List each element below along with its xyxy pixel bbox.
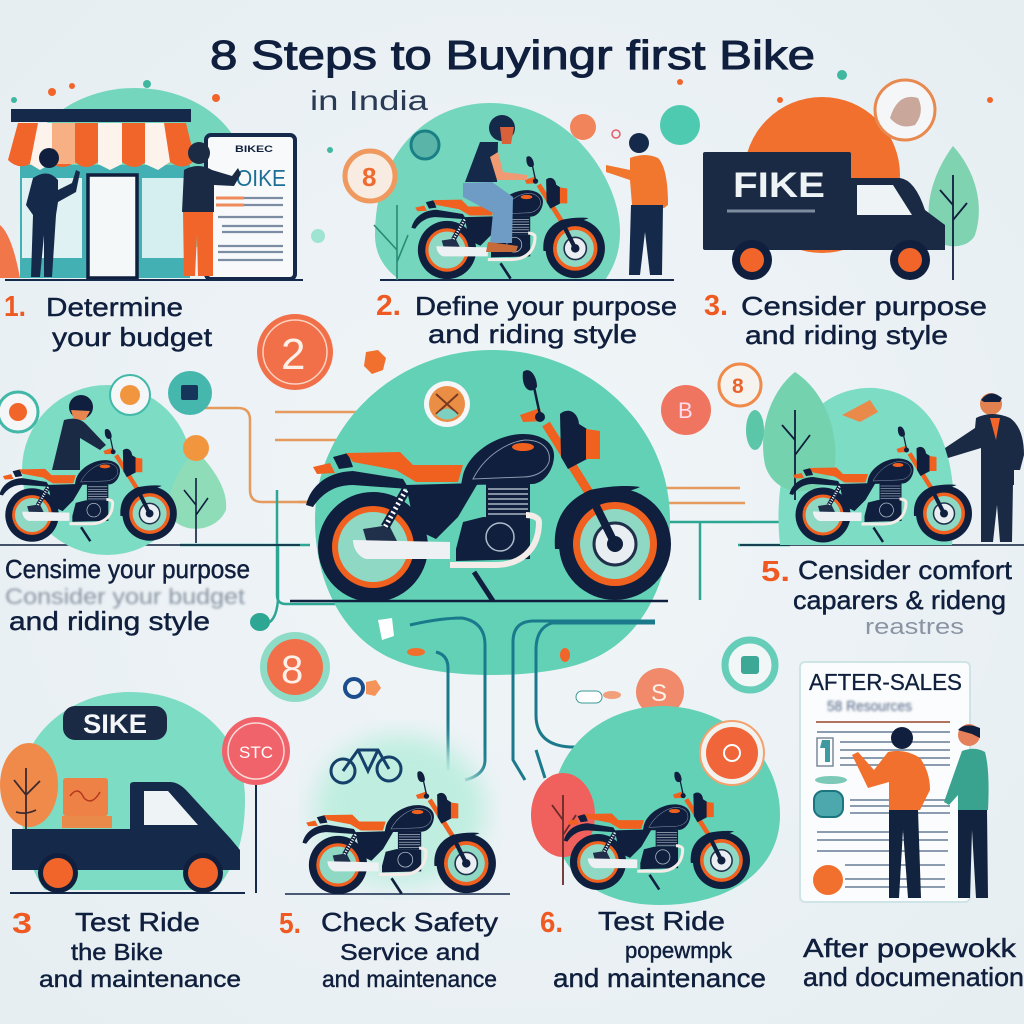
heading: AFTER-SALES bbox=[809, 669, 962, 695]
connector lines lower bbox=[410, 618, 655, 780]
panel: step 3 truck bbox=[703, 80, 979, 280]
rider bbox=[463, 115, 527, 252]
step 4 label: Consider your budget bbox=[5, 584, 245, 609]
teal backdrop bbox=[25, 88, 245, 262]
badge 8: 8 bbox=[281, 648, 303, 692]
step 3 label bbox=[704, 290, 987, 350]
document panel: BIKEC bbox=[235, 144, 274, 154]
red tree bbox=[531, 773, 595, 885]
tree bbox=[168, 435, 226, 543]
step 1 label: Determine bbox=[46, 292, 183, 322]
motorcycle bbox=[411, 156, 605, 279]
step 5 label: 5. bbox=[761, 556, 790, 588]
step 5 label bbox=[761, 555, 1013, 639]
truck bbox=[12, 782, 240, 893]
step 4 label: and riding style bbox=[9, 606, 210, 636]
left edge orange plant bbox=[0, 225, 20, 278]
panel: step 5 bike bbox=[746, 372, 1024, 545]
orange sun bbox=[744, 97, 900, 253]
motorcycle bbox=[790, 427, 972, 542]
after-sales label bbox=[803, 933, 1024, 992]
subheading: 58 Resources bbox=[827, 698, 912, 715]
panel: step 4 rider bbox=[0, 371, 226, 555]
bottom middle label: and maintenance bbox=[322, 966, 497, 992]
person right bbox=[182, 142, 241, 276]
step 1 label: your budget bbox=[52, 322, 213, 352]
bottom middle label bbox=[279, 907, 498, 992]
storefront bbox=[8, 109, 195, 278]
ground line bbox=[285, 893, 510, 895]
step 2 label: Define your purpose bbox=[415, 291, 677, 321]
number badge 2 bbox=[257, 314, 333, 390]
rider bbox=[52, 395, 106, 470]
step 2 label: and riding style bbox=[428, 319, 637, 349]
badge bbox=[345, 151, 395, 201]
round badge bbox=[700, 721, 764, 785]
S badge bbox=[636, 668, 684, 716]
panel: bottom right bike bbox=[531, 706, 780, 905]
person left bbox=[26, 148, 80, 277]
step 5 label: reastres bbox=[865, 614, 964, 639]
badge B: B bbox=[678, 398, 693, 423]
step 2 label: 2. bbox=[376, 290, 401, 322]
gauge icon bbox=[424, 381, 470, 427]
connector end dot bbox=[250, 613, 270, 631]
number badge 2: 2 bbox=[281, 330, 305, 379]
connector lines upper bbox=[0, 408, 1024, 624]
truck bbox=[703, 152, 945, 280]
truck: FIKE bbox=[733, 166, 825, 205]
bottom middle label: Check Safety bbox=[321, 907, 498, 937]
teal backdrop bbox=[778, 388, 954, 545]
teal circle bbox=[315, 350, 670, 675]
tree bbox=[929, 146, 979, 280]
step 5 label: caparers & rideng bbox=[793, 585, 1006, 615]
badge: 8 bbox=[362, 162, 376, 192]
mini icons bbox=[813, 738, 847, 895]
bottom right label: 6. bbox=[540, 907, 563, 939]
motorcycle bbox=[302, 771, 496, 894]
pale glow bbox=[315, 735, 485, 885]
panel: bottom middle bike bbox=[285, 735, 510, 894]
ring badge: 8 bbox=[732, 375, 744, 398]
person teal bbox=[944, 724, 989, 898]
small red icon bbox=[612, 130, 620, 138]
badge B bbox=[661, 385, 711, 435]
motorcycle bbox=[564, 772, 750, 890]
orange badge bbox=[570, 114, 596, 140]
bottom middle label: 5. bbox=[279, 908, 301, 940]
crate bbox=[62, 778, 112, 828]
ground line bbox=[290, 600, 668, 602]
small teal badge bbox=[411, 131, 439, 159]
main motorcycle bbox=[306, 370, 671, 602]
text rows bbox=[816, 721, 950, 723]
round icon bbox=[875, 80, 935, 140]
document panel bbox=[206, 135, 295, 279]
step 3 label: 3. bbox=[704, 290, 728, 322]
S badge: S bbox=[651, 680, 667, 707]
bottom left label bbox=[12, 907, 241, 992]
step 3 label: and riding style bbox=[745, 320, 948, 350]
bottom left label: the Bike bbox=[71, 939, 163, 965]
ring badge teal bbox=[725, 640, 775, 690]
after-sales label: and documenation bbox=[803, 962, 1024, 992]
bottom middle label: Service and bbox=[340, 939, 480, 965]
document panel: OIKE bbox=[236, 165, 286, 191]
step 3 label: Censider purpose bbox=[741, 291, 987, 321]
small orange flower bbox=[364, 350, 386, 374]
step 1 label bbox=[4, 291, 213, 352]
bottom left label: and maintenance bbox=[39, 966, 241, 992]
tree bbox=[746, 372, 835, 500]
ground line bbox=[380, 279, 674, 281]
standing man bbox=[606, 133, 668, 275]
step 4 label: Censime your purpose bbox=[5, 554, 250, 584]
title: 8 Steps to Buyingr first Bike bbox=[210, 32, 815, 78]
stop sign bbox=[222, 717, 290, 893]
bottom left label: 3 bbox=[12, 908, 32, 940]
ring badge bbox=[719, 364, 761, 406]
bottom right label bbox=[540, 906, 766, 993]
teal backdrop bbox=[22, 385, 192, 555]
icons bbox=[0, 371, 212, 432]
bottom right label: Test Ride bbox=[598, 906, 725, 936]
person orange bbox=[852, 727, 930, 898]
teal ring icon bbox=[660, 105, 700, 145]
bottom left label: Test Ride bbox=[75, 907, 200, 937]
after-sales label: After popewokk bbox=[803, 933, 1017, 963]
title bbox=[210, 32, 815, 116]
teal backdrop bbox=[20, 692, 245, 890]
motorcycle bbox=[0, 429, 177, 542]
small orange cluster bbox=[842, 400, 878, 422]
decorative confetti top bbox=[11, 70, 993, 243]
small tree bbox=[374, 205, 408, 280]
sign: SIKE bbox=[83, 709, 147, 739]
panel: step 1 store bbox=[8, 88, 295, 279]
ground line store bbox=[5, 279, 303, 281]
badge 8 bbox=[260, 632, 330, 702]
step 2 label bbox=[376, 290, 677, 349]
step 4 label bbox=[5, 554, 250, 636]
panel: step 2 rider bbox=[345, 103, 700, 280]
man in suit bbox=[945, 393, 1024, 542]
step 1 label: 1. bbox=[4, 291, 26, 323]
center panel: main bike bbox=[290, 350, 671, 675]
ground line bbox=[10, 892, 245, 894]
step 5 label: Censider comfort bbox=[798, 555, 1013, 585]
paper bbox=[800, 662, 970, 902]
bottom right label: and maintenance bbox=[553, 963, 766, 993]
small floating marks bbox=[345, 618, 621, 757]
teal backdrop bbox=[375, 103, 620, 280]
title: in India bbox=[310, 85, 429, 116]
teal backdrop bbox=[552, 706, 780, 905]
bottom right label: popewmpk bbox=[625, 938, 733, 963]
sign bbox=[63, 706, 167, 740]
stop sign: STC bbox=[239, 743, 273, 762]
orange tree bbox=[0, 743, 58, 830]
panel: bottom left truck bbox=[0, 692, 290, 893]
bicycle icon bbox=[331, 750, 401, 783]
panel: after-sales document bbox=[800, 662, 989, 902]
